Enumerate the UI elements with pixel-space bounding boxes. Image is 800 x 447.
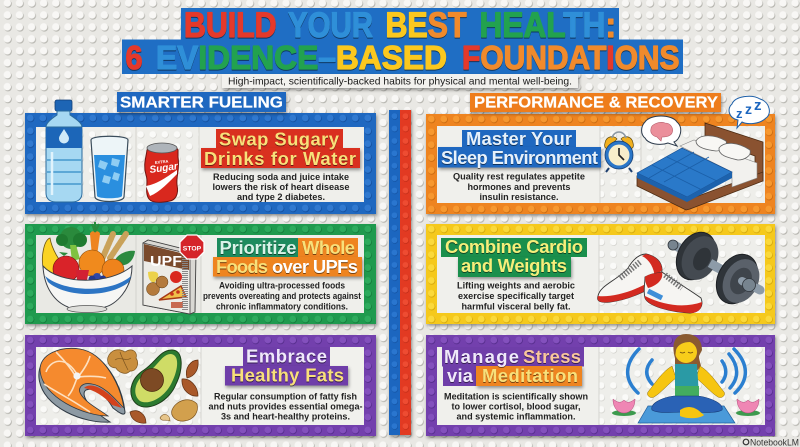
heading: manage stress via meditation: Stress: [523, 346, 581, 367]
icon: ultra-processed food box with stop sign: STOP: [183, 246, 202, 252]
heading: combine cardio and weights: and Weights: [461, 255, 567, 276]
text block: 3s and heart-healthy proteins.: [221, 412, 350, 422]
icon: zzz thought bubble: z: [745, 101, 752, 117]
heading: master your sleep environment: Master Your: [466, 128, 572, 149]
heading: embrace healthy fats: Healthy Fats: [231, 365, 344, 386]
icon: walnut: [108, 350, 138, 373]
text block: exercise specifically target: [458, 291, 575, 302]
heading: prioritize whole foods over upfs: Foods: [216, 256, 268, 277]
heading: prioritize whole foods over upfs: over UPFs: [272, 256, 358, 277]
text block: [453, 172, 585, 203]
panel background: [36, 127, 364, 202]
text block: Meditation is scientifically shown: [444, 392, 588, 402]
icon: zzz thought bubble: z: [754, 97, 762, 114]
icon: bed: [637, 123, 763, 210]
text block: [208, 392, 362, 422]
icon: zzz thought bubble: [729, 96, 769, 128]
title: BEST: [386, 6, 466, 45]
heading: swap sugary drinks for water: Swap Sugary: [219, 128, 340, 150]
icon: almonds and walnut: [130, 360, 198, 423]
heading: combine cardio and weights: Combine Cardio: [445, 236, 583, 257]
icon: lotus flowers: [612, 399, 760, 416]
text block: Reducing soda and juice intake: [213, 172, 349, 183]
panel frame: [426, 114, 775, 214]
panel frame: [426, 335, 775, 436]
text block: and type 2 diabetes.: [237, 192, 325, 203]
text block: and systemic inflammation.: [456, 412, 576, 422]
icon: salmon steak: [39, 348, 125, 422]
heading: embrace healthy fats: Embrace: [246, 346, 327, 367]
icon: zzz thought bubble: z: [736, 106, 743, 121]
icon: alarm clock: [605, 132, 633, 172]
subtitle: High-impact, scientifically-backed habits for physical and mental well-being.: [228, 77, 572, 88]
panel background: [437, 235, 765, 313]
text block: and nuts provides essential omega-: [208, 402, 362, 412]
title: HEALTH:: [480, 6, 616, 45]
panel: healthy fats: [25, 335, 376, 436]
panel: meditation: [426, 334, 775, 436]
centre divider: blue and red brick columns: [389, 110, 411, 435]
panel: exercise: [426, 224, 775, 324]
heading: swap sugary drinks for water: Drinks for Water: [204, 148, 356, 169]
icon: ultra-processed food box with stop sign: UPF: [150, 254, 182, 270]
heading: manage stress via meditation: via: [447, 365, 474, 386]
panel background: [437, 347, 765, 425]
text block: chronic inflammatory conditions.: [216, 302, 348, 312]
panel background: [437, 126, 765, 203]
section label: performance and recovery: PERFORMANCE & RECOVERY: [474, 94, 719, 112]
title: FOUNDATIONS: [462, 39, 680, 76]
icon: soda can: [145, 143, 180, 202]
text block: prevents overeating and protects against: [203, 291, 362, 302]
text block: to lower cortisol, blood sugar,: [452, 402, 581, 412]
text block: [457, 280, 576, 312]
heading: manage stress via meditation: Manage: [444, 346, 519, 367]
panel: hydration: [25, 111, 376, 214]
heading: prioritize whole foods over upfs: Whole: [302, 237, 355, 258]
icon: calm waves: [628, 349, 745, 393]
text block: Quality rest regulates appetite: [453, 172, 585, 182]
icon: soda can: EXTRA: [155, 159, 169, 165]
text block: [203, 280, 362, 312]
icon: fruit and vegetable bowl: [42, 222, 135, 312]
icon: yoga mat: [638, 406, 735, 423]
heading: master your sleep environment: Sleep Environment: [441, 147, 598, 168]
text block: Lifting weights and aerobic: [457, 280, 576, 292]
panel frame: [25, 335, 376, 436]
text block: Avoiding ultra-processed foods: [219, 280, 345, 292]
panel background: [36, 347, 364, 425]
title: YOUR: [288, 6, 373, 45]
title: [122, 6, 683, 76]
heading: manage stress via meditation: [442, 346, 584, 386]
text block: insulin resistance.: [480, 192, 558, 203]
icon: ultra-processed food box with stop sign: [143, 235, 204, 314]
heading: combine cardio and weights: [441, 236, 587, 277]
icon: water bottle: [46, 111, 82, 202]
icon: thought bubble with brain: [642, 116, 681, 146]
icon: water bottle cap and shoulder: [46, 100, 82, 127]
text block: Regular consumption of fatty fish: [214, 392, 357, 402]
text block: harmful visceral belly fat.: [462, 302, 570, 312]
icon: soda can: Sugar: [149, 161, 180, 176]
text block: [444, 392, 588, 422]
heading: swap sugary drinks for water: [201, 128, 360, 169]
panel frame: [25, 224, 376, 324]
panel frame: [25, 113, 376, 214]
text block: [212, 172, 350, 203]
heading: embrace healthy fats: [225, 346, 348, 386]
heading: prioritize whole foods over upfs: [213, 237, 362, 277]
icon: avocado half: [131, 350, 181, 407]
icon: person meditating: [647, 334, 725, 418]
title: BUILD: [184, 6, 276, 45]
icon: glass of water: [91, 136, 128, 202]
panel: whole foods: [25, 222, 376, 324]
text block: hormones and prevents: [468, 182, 570, 193]
text block: lowers the risk of heart disease: [212, 182, 350, 193]
panel: sleep: [426, 96, 775, 214]
heading: master your sleep environment: [438, 128, 601, 168]
section label: smarter fueling: SMARTER FUELING: [120, 94, 283, 112]
icon: red and white sneakers: [598, 254, 702, 313]
title: 6: [126, 39, 142, 76]
icon: dumbbell: [668, 226, 767, 311]
heading: prioritize whole foods over upfs: Prioritize: [220, 237, 296, 258]
panel frame: [426, 224, 775, 324]
title: EVIDENCE–BASED: [156, 39, 447, 76]
panel background: [36, 235, 364, 313]
heading: manage stress via meditation: Meditation: [482, 365, 578, 386]
